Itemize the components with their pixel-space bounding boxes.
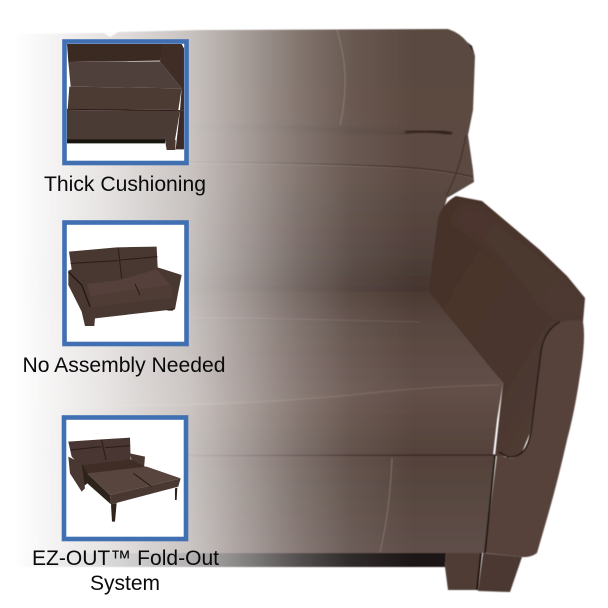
arm top panel highlight — [450, 204, 580, 316]
lower rail — [0, 455, 495, 553]
caption: EZ-OUT fold-out system: EZ-OUT™ Fold-Out — [32, 547, 219, 570]
thumbnail 2 sofa — [68, 247, 182, 326]
seat top — [0, 291, 503, 408]
thumbnail 3 frame — [64, 418, 186, 539]
thumbnail: fold-out — [64, 418, 186, 539]
black under frame — [0, 553, 446, 567]
thumbnail 2 frame — [64, 222, 186, 344]
seat front cushion — [0, 383, 503, 456]
side front panel of arm and base — [485, 320, 584, 557]
thumbnail: thick cushioning — [64, 42, 186, 163]
thumbnail: no assembly — [64, 222, 186, 344]
headrest notch — [467, 42, 475, 56]
thumbnail 1 sofa crop — [67, 44, 184, 150]
sofa legs — [445, 553, 481, 590]
thumbnail 1 frame — [64, 42, 186, 163]
caption: EZ-OUT fold-out system: System — [90, 572, 160, 595]
caption: no assembly needed: No Assembly Needed — [22, 354, 225, 377]
back seams and creases — [0, 30, 473, 285]
caption: EZ-OUT fold-out system — [32, 547, 219, 595]
piping on arm — [499, 322, 560, 457]
thumbnail 3 sofa bed — [68, 438, 181, 522]
arm shape — [428, 196, 585, 457]
caption: thick cushioning: Thick Cushioning — [44, 173, 206, 196]
sofa back cushion — [0, 29, 475, 295]
